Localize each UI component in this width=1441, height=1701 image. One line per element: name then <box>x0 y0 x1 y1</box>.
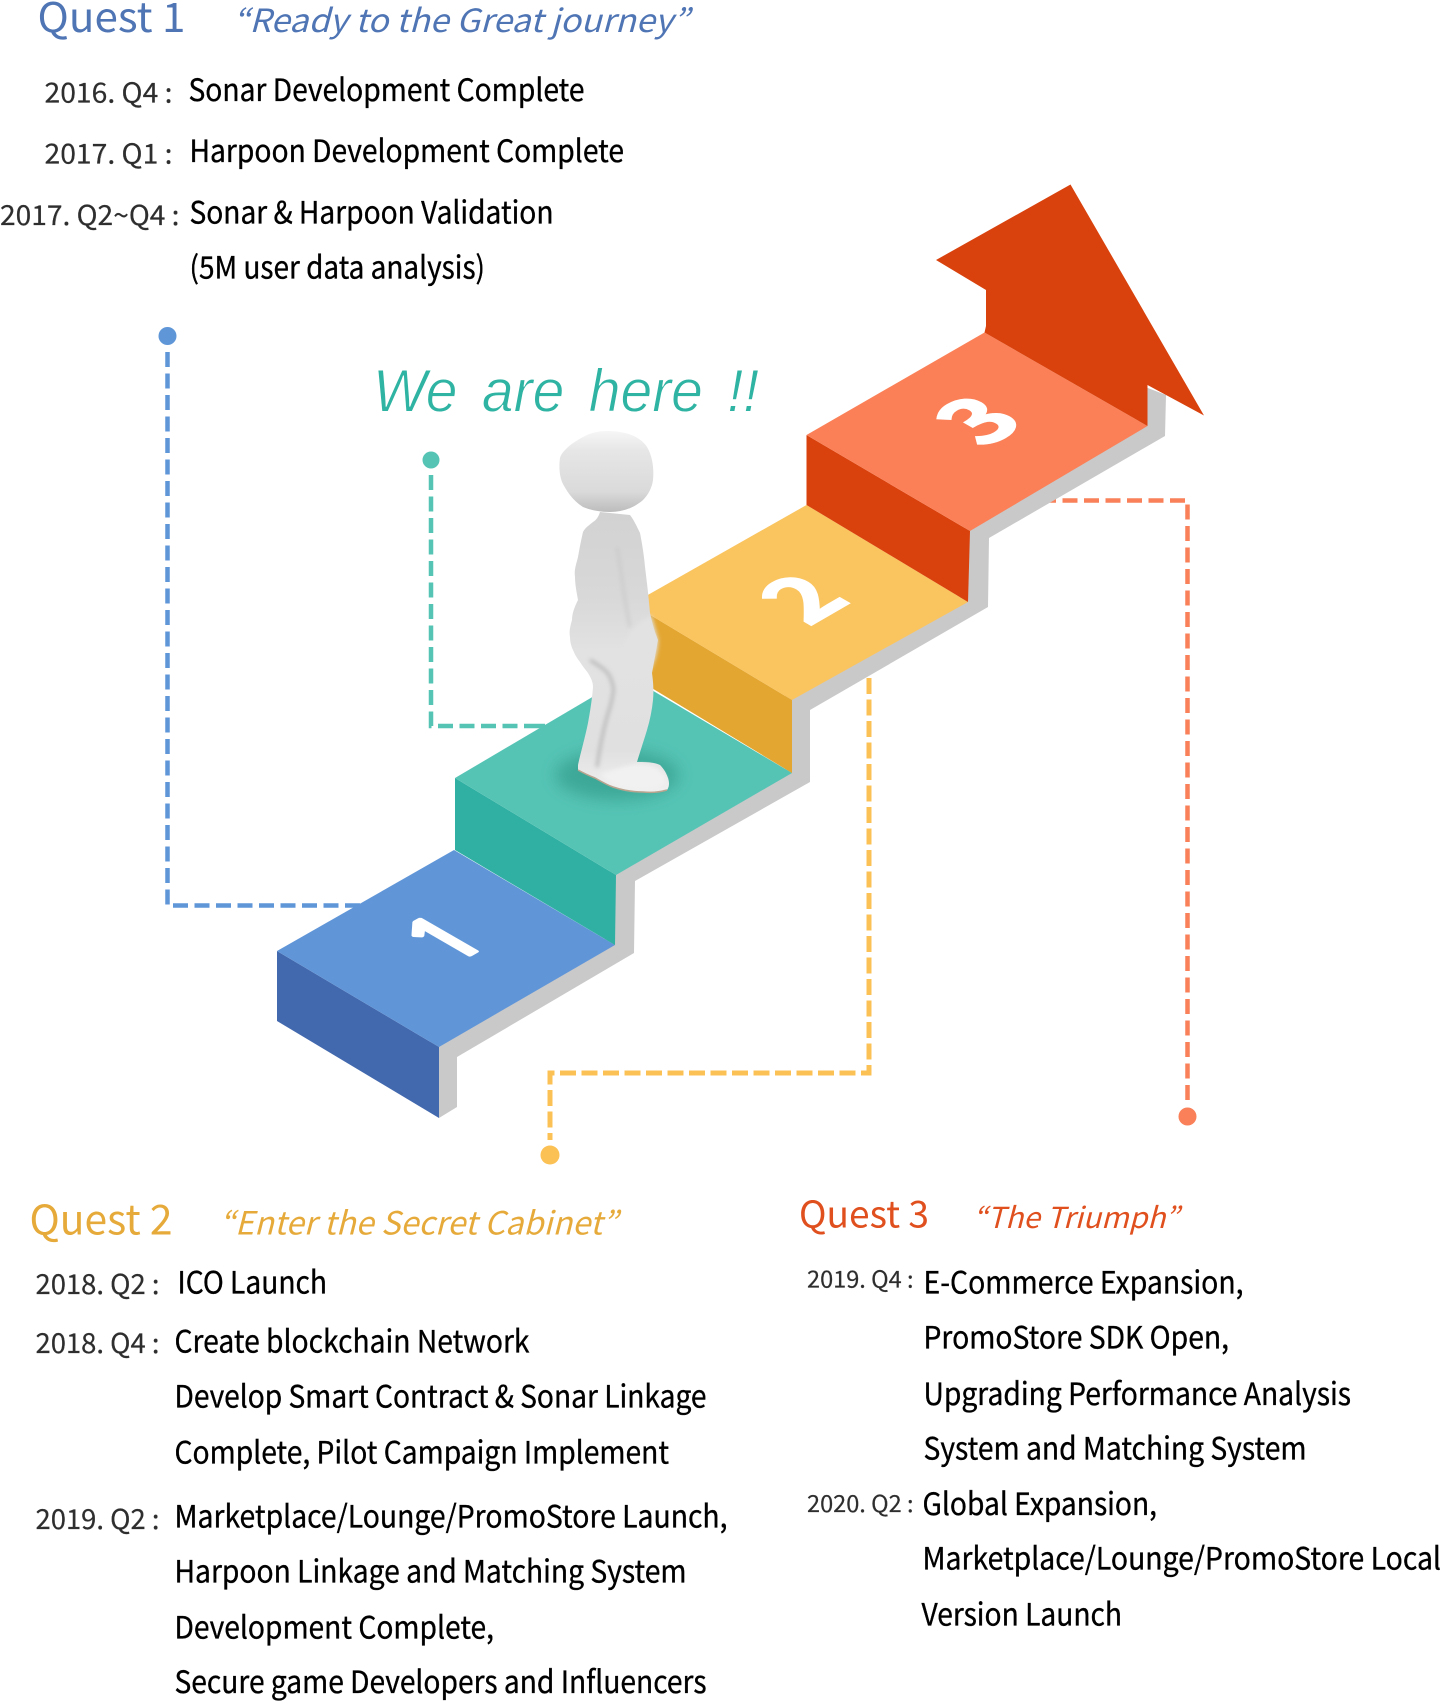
tagline: quest 3: “The Triumph” <box>973 1195 1183 1237</box>
milestone: 2020 Q2: Global Expansion, <box>922 1479 1157 1524</box>
panel: quest 3 <box>799 1184 1441 1634</box>
step 2 <box>455 676 792 945</box>
milestone: 2018 Q2: ICO Launch <box>178 1258 327 1302</box>
milestone: 2017 Q2 to Q4: Sonar & Harpoon Validation <box>190 188 554 232</box>
figure hand <box>623 615 658 674</box>
milestone: 2020 Q2: Version Launch <box>922 1590 1122 1634</box>
milestone: 2017 Q2 to Q4 <box>0 188 554 288</box>
connector: blue dashed line with dot <box>158 327 370 906</box>
figure arm crease <box>617 547 630 627</box>
connector: gold dashed line with dot <box>540 678 869 1164</box>
connector: orange dashed line with dot <box>1040 500 1196 1126</box>
milestone: 2018 Q2 <box>36 1258 327 1302</box>
milestone: 2017 Q1 <box>44 126 624 172</box>
figure shadow <box>555 750 679 800</box>
milestone: 2018 Q4 <box>36 1316 706 1472</box>
milestone: 2019 Q2: Secure game Developers and Influencers <box>174 1657 706 1701</box>
heading: quest 3: Quest 3 <box>799 1184 929 1238</box>
figure leg crease <box>590 660 613 767</box>
milestone: 2019 Q2: Marketplace/Lounge/PromoStore Launch, <box>174 1492 728 1536</box>
milestone: 2019 Q4: 2019. Q4 : <box>807 1260 914 1294</box>
milestone: 2018 Q4: Develop Smart Contract & Sonar Linkage <box>174 1372 706 1416</box>
panel: quest 2 <box>30 1186 728 1701</box>
milestone: 2017 Q1: Harpoon Development Complete <box>190 126 624 171</box>
milestone: 2019 Q2: Harpoon Linkage and Matching System <box>174 1546 686 1592</box>
panel: quest 1 <box>0 0 694 288</box>
milestone: 2018 Q4: 2018. Q4 : <box>36 1322 160 1361</box>
milestone: 2019 Q4 <box>807 1258 1351 1468</box>
milestone: 2018 Q4: Complete, Pilot Campaign Implement <box>174 1428 669 1472</box>
milestone: 2019 Q2 <box>36 1492 728 1701</box>
figure body <box>570 512 669 792</box>
milestone: 2020 Q2 <box>807 1479 1441 1634</box>
figure head <box>559 431 653 512</box>
milestone: 2016 Q4: Sonar Development Complete <box>188 65 584 110</box>
milestone: 2020 Q2: 2020. Q2 : <box>807 1485 914 1519</box>
grey stair shadow <box>430 385 1166 1118</box>
milestone: 2018 Q2: 2018. Q2 : <box>36 1263 160 1302</box>
milestone: 2016 Q4: 2016. Q4 : <box>44 72 172 110</box>
milestone: 2017 Q2 to Q4: 2017. Q2~Q4 : <box>0 194 180 233</box>
step 3 gold <box>632 505 968 773</box>
milestone: 2019 Q4: E-Commerce Expansion, <box>924 1258 1244 1302</box>
callout: we are here: We are here !! <box>373 358 759 424</box>
milestone: 2019 Q4: Upgrading Performance Analysis <box>924 1369 1351 1414</box>
arrow head <box>936 184 1204 426</box>
milestone: 2016 Q4 <box>44 65 584 110</box>
milestone: 2017 Q2 to Q4: (5M user data analysis) <box>190 242 485 288</box>
number 1: 1 <box>386 905 507 975</box>
tagline: quest 2: “Enter the Secret Cabinet” <box>220 1198 622 1244</box>
connector: teal dashed line with dot <box>422 452 552 726</box>
step 4 orange <box>806 332 1148 602</box>
stair arrow graphic <box>277 184 1204 1118</box>
milestone: 2019 Q2: Development Complete, <box>174 1602 494 1648</box>
number 3: 3 <box>896 373 1050 462</box>
heading: quest 2: Quest 2 <box>30 1186 172 1246</box>
milestone: 2019 Q4: System and Matching System <box>924 1424 1306 1468</box>
step 1 <box>277 850 615 1118</box>
figure foot highlight <box>600 764 666 789</box>
number 2: 2 <box>721 551 875 640</box>
figure: white character standing on step <box>555 431 679 800</box>
milestone: 2019 Q4: PromoStore SDK Open, <box>924 1312 1229 1358</box>
milestone: 2019 Q2: 2019. Q2 : <box>36 1498 160 1537</box>
milestone: 2018 Q4: Create blockchain Network <box>174 1316 530 1362</box>
milestone: 2017 Q1: 2017. Q1 : <box>44 132 172 172</box>
figure soles <box>578 770 667 792</box>
